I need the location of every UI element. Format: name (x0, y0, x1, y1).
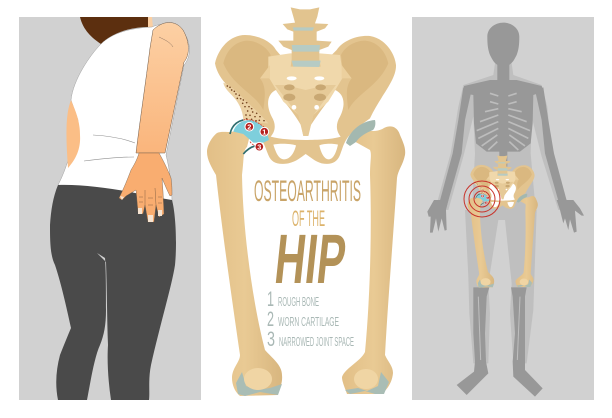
marker 3: 3 (257, 142, 261, 151)
worn cartilage (233, 120, 269, 143)
body silhouette (438, 64, 560, 210)
elbow crease (159, 37, 173, 47)
pelvis silhouette (215, 35, 396, 164)
skull (487, 23, 519, 67)
right knee (345, 369, 389, 394)
arm (136, 22, 188, 153)
sacrum (268, 53, 343, 136)
left knee (236, 368, 282, 396)
spongy bone patch (223, 83, 268, 123)
hand with fingers (119, 153, 172, 222)
list: causes: ROUGH BONE (278, 294, 319, 309)
right femur (342, 126, 405, 394)
gap between the legs (87, 253, 111, 400)
sacral foramina (283, 84, 326, 101)
grey trousers (50, 185, 176, 400)
inner ilium shading (223, 41, 271, 110)
obturator holes (273, 144, 338, 159)
left hand (427, 200, 448, 233)
item 3: narrowed joint space: 3 (267, 328, 275, 351)
right hand (557, 200, 584, 233)
pelvic opening (268, 90, 344, 140)
item 1: rough bone (267, 288, 319, 311)
item 3: narrowed joint space (267, 328, 354, 351)
item 2: worn cartilage: WORN CARTILAGE (278, 314, 339, 329)
text: OSTEOARTHRITIS (254, 175, 361, 208)
clavicles and ribcage (464, 80, 543, 152)
marker 1: 1 (262, 127, 266, 136)
pelvis and spine (215, 7, 396, 164)
finger lines (139, 188, 162, 205)
title: hip: HIP (271, 219, 350, 298)
spinal discs (292, 27, 321, 67)
lower leg bones (457, 287, 543, 397)
coloured pelvis and femurs (467, 155, 538, 288)
right hip cartilage (346, 120, 375, 146)
panel: skeleton (412, 17, 594, 400)
ribs gaps (477, 93, 530, 150)
neck (148, 17, 153, 28)
marker 2: 2 (247, 122, 251, 131)
item 2: worn cartilage (267, 308, 339, 331)
item 1: rough bone: 1 (267, 288, 274, 311)
panel: bones of the hip (207, 7, 405, 396)
text: OF THE (292, 206, 325, 231)
left torso skin (66, 100, 80, 168)
white shirt (58, 24, 189, 203)
item 2: worn cartilage: 2 (267, 308, 274, 331)
left hip joint detail (223, 83, 269, 154)
panel: woman holding hip (19, 17, 201, 400)
hair (80, 17, 148, 44)
leg silhouette (465, 210, 537, 363)
spine and neck (497, 63, 509, 167)
joint outline (230, 120, 255, 154)
lower skeleton (427, 200, 584, 397)
fingernails (120, 196, 162, 222)
text: NARROWED JOINT SPACE (279, 334, 354, 349)
pain target rings (464, 181, 500, 217)
upper skeleton (435, 23, 572, 213)
list: causes (267, 288, 354, 351)
arm bones (438, 87, 568, 207)
shirt folds (84, 135, 135, 161)
left femur (207, 128, 282, 396)
lumbar vertebrae (278, 7, 332, 67)
